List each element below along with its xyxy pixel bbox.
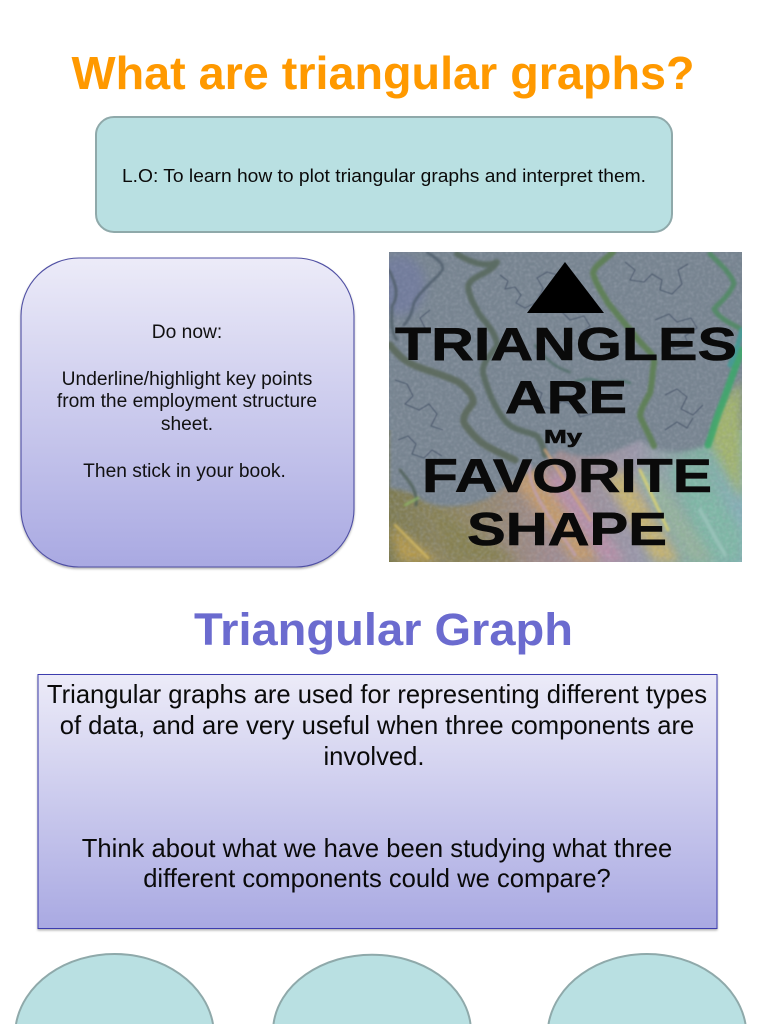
explanation text: different components could we compare?: [143, 865, 611, 893]
do now text: from the employment structure: [57, 391, 317, 412]
do now text: sheet.: [161, 414, 213, 435]
poster text: TRIANGLES: [395, 318, 737, 370]
iridescent sediment: [389, 380, 742, 562]
oval: component two: [274, 955, 470, 1024]
do now text: Then stick in your book.: [83, 461, 286, 482]
explanation text: [47, 681, 707, 893]
poster text: [395, 318, 737, 555]
bright sediment streaks: [395, 450, 725, 558]
panel: triangular graph explanation: [38, 674, 717, 928]
learning objective box: L.O: To learn how to plot triangular graphs and interpret them.: [122, 165, 646, 186]
purple tint: [389, 259, 421, 311]
learning objective box: [96, 117, 672, 232]
explanation text: involved.: [323, 743, 425, 771]
explanation text: of data, and are very useful when three components are: [60, 712, 694, 740]
poster text: FAVORITE: [422, 449, 712, 502]
title: What are triangular graphs?: [72, 47, 694, 99]
section heading: Triangular Graph: [194, 604, 573, 655]
oval: component three: [548, 954, 746, 1024]
poster text: SHAPE: [467, 503, 667, 555]
land texture: [389, 396, 741, 562]
river channels: [389, 252, 742, 505]
panel: do now: [21, 258, 354, 567]
fine creeks: [395, 262, 703, 458]
do now text: Do now:: [152, 322, 222, 343]
poster text: My: [544, 427, 582, 447]
do now text: [57, 322, 317, 482]
do now text: Underline/highlight key points: [62, 369, 312, 390]
land lobes: [389, 399, 720, 508]
explanation text: Think about what we have been studying what three: [82, 835, 672, 863]
triangle icon: [527, 262, 604, 313]
image: triangles are my favorite shape poster: [375, 252, 742, 562]
explanation text: Triangular graphs are used for representing different types: [47, 681, 707, 709]
poster text: ARE: [505, 371, 627, 423]
oval: component one: [16, 954, 213, 1024]
